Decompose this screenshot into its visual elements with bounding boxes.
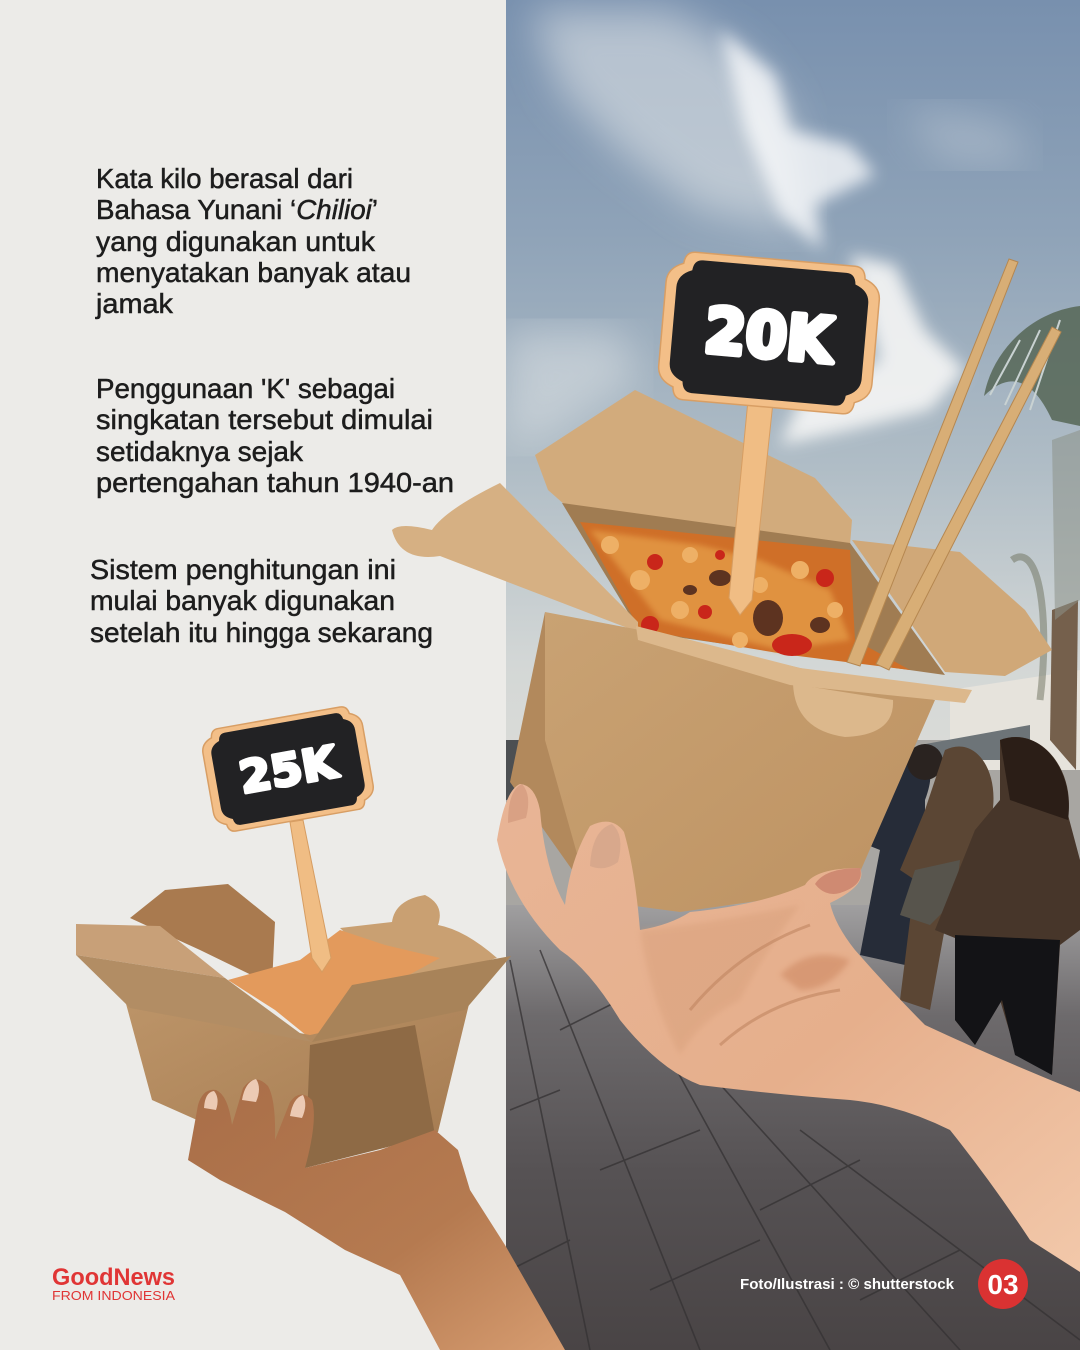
text block 1: asal kata kilo: Kata kilo berasal dari — [96, 163, 353, 194]
back flap — [535, 390, 852, 545]
text block 1: asal kata kilo — [95, 163, 411, 319]
text block 1: asal kata kilo: Bahasa Yunani ‘Chilioi’ — [96, 194, 378, 225]
stick of 20K sign — [729, 400, 773, 615]
hand holding large box — [497, 784, 1080, 1272]
box side fold — [305, 1025, 435, 1168]
price sign 25K — [199, 704, 377, 834]
left flap — [392, 483, 638, 632]
front lip — [636, 626, 972, 703]
page number badge: 03 — [987, 1269, 1019, 1300]
price sign 25K: 25K — [236, 737, 343, 804]
round tab — [793, 684, 893, 737]
price sign 20K — [656, 250, 882, 416]
clouds — [506, 10, 1030, 445]
text block 3: sistem penghitungan: mulai banyak digunakan — [90, 585, 395, 616]
floor — [506, 905, 1080, 1350]
large noodle box with 20K sign and hand — [392, 250, 1080, 1272]
rice food — [580, 522, 910, 670]
box left side — [510, 612, 590, 895]
fried food — [228, 930, 440, 1040]
text block 2: penggunaan K: setidaknya sejak — [96, 436, 304, 467]
stick of 25K sign — [290, 820, 331, 972]
floor planks — [510, 930, 1080, 1350]
front right flap — [312, 956, 511, 1042]
horizon building — [506, 740, 1080, 905]
text block 1: asal kata kilo: menyatakan banyak atau — [96, 257, 411, 288]
box front face — [545, 612, 935, 912]
palm tree — [984, 306, 1080, 770]
left background panel — [0, 0, 506, 1350]
logo: GoodNews From Indonesia: GoodNews — [52, 1264, 175, 1291]
chopsticks — [847, 259, 1061, 670]
crowd of people — [855, 737, 1080, 1075]
text block 3: sistem penghitungan — [90, 554, 433, 648]
fingernails — [508, 784, 528, 823]
hand holding small box — [188, 1079, 565, 1350]
text block 1: asal kata kilo: jamak — [95, 288, 174, 319]
logo: GoodNews From Indonesia: FROM INDONESIA — [52, 1288, 175, 1303]
sky — [506, 0, 1080, 780]
box interior — [562, 503, 945, 675]
text block 2: penggunaan K: pertengahan tahun 1940-an — [96, 467, 454, 498]
page number badge — [978, 1259, 1028, 1309]
text block 2: penggunaan K: Penggunaan 'K' sebagai — [96, 373, 395, 404]
text block 2: penggunaan K: singkatan tersebut dimulai — [96, 404, 433, 435]
price sign 20K: 20K — [702, 294, 838, 378]
text block 3: sistem penghitungan: Sistem penghitungan ini — [90, 554, 396, 585]
logo: GoodNews From Indonesia — [52, 1264, 175, 1303]
right back flap — [340, 895, 497, 985]
left flap — [76, 924, 225, 978]
small food box with 25K sign and hand — [76, 704, 565, 1350]
back flap — [130, 884, 275, 985]
front left flap — [76, 955, 312, 1042]
text block 2: penggunaan K — [96, 373, 454, 498]
right flap — [852, 540, 1052, 676]
text block 1: asal kata kilo: yang digunakan untuk — [96, 226, 376, 257]
box body — [125, 1000, 470, 1168]
photo credit: Foto/Ilustrasi : © shutterstock — [740, 1276, 955, 1293]
fingernails — [204, 1091, 218, 1110]
photo background: sky, clouds, floor, people — [506, 0, 1080, 1350]
text block 3: sistem penghitungan: setelah itu hingga sekarang — [90, 617, 433, 648]
